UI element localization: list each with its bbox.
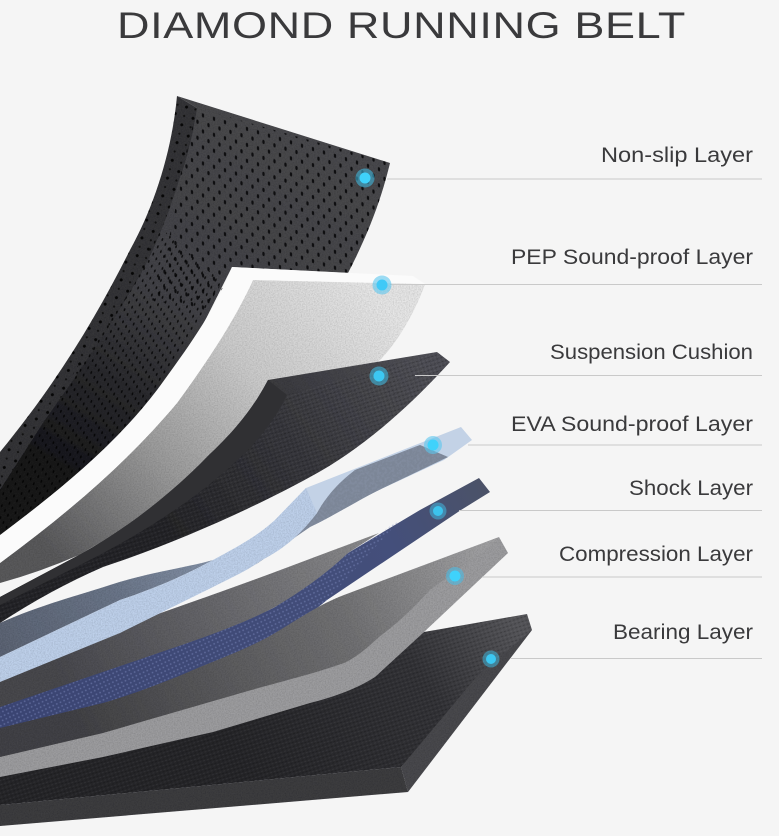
perforations side <box>0 96 197 490</box>
dot: shock <box>430 502 446 520</box>
EVA tip surface <box>275 427 472 550</box>
layer: bearing <box>0 614 532 826</box>
dot: non-slip <box>356 168 374 188</box>
dot: cushion <box>370 366 388 386</box>
dot: EVA <box>424 436 442 454</box>
shock grey surface <box>0 537 499 757</box>
perforations upper <box>150 108 390 310</box>
shock light edge <box>0 537 508 777</box>
layer: shock <box>0 537 508 777</box>
non-slip top face <box>0 96 390 560</box>
compression grey face <box>0 533 379 707</box>
dot: PEP <box>372 276 392 294</box>
EVA mottled texture <box>255 445 448 565</box>
cushion left edge <box>0 380 287 605</box>
non-slip side face <box>0 96 200 560</box>
label: bearing: Bearing Layer <box>613 621 753 644</box>
EVA mottled shadow <box>255 445 448 565</box>
PEP grey surface <box>0 280 425 583</box>
layer: suspension cushion <box>0 352 450 623</box>
dot: bearing <box>482 650 500 668</box>
cushion weave <box>0 352 450 623</box>
layer stack illustration <box>0 96 532 826</box>
PEP white edge <box>0 267 425 563</box>
label: PEP: PEP Sound-proof Layer <box>511 246 753 269</box>
layer: non-slip <box>0 96 390 560</box>
layer: compression <box>0 478 490 740</box>
label: suspension: Suspension Cushion <box>550 341 753 364</box>
bearing weave <box>0 614 532 805</box>
compression dots <box>0 520 400 740</box>
layer: PEP sound-proof <box>0 267 425 583</box>
EVA grey-blue underside <box>0 560 213 657</box>
label: compression: Compression Layer <box>559 543 753 566</box>
bearing top face <box>0 614 532 805</box>
labels <box>511 144 753 644</box>
title: DIAMOND RUNNING BELT <box>117 5 686 46</box>
cushion surface <box>0 352 450 623</box>
EVA light blue strip <box>0 488 317 682</box>
label: shock: Shock Layer <box>629 477 753 500</box>
dot: compression <box>446 567 464 585</box>
compression blue face <box>0 478 490 740</box>
callout lines <box>387 179 762 658</box>
bearing front edge <box>0 767 408 826</box>
bearing side edge <box>401 630 532 792</box>
label: non-slip: Non-slip Layer <box>601 144 753 167</box>
perforations lower <box>0 227 225 545</box>
layer: EVA sound-proof <box>0 427 472 682</box>
marker dots <box>356 168 500 668</box>
label: EVA: EVA Sound-proof Layer <box>511 413 753 436</box>
